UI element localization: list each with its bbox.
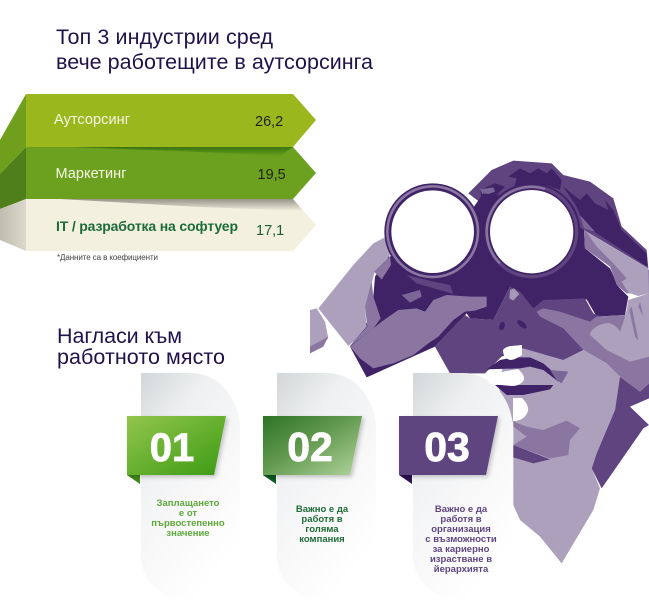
text 03: работя в — [440, 514, 482, 525]
bar: Маркетинг: Маркетинг — [56, 166, 126, 182]
text 02: работя в — [301, 514, 343, 525]
bar: IT / разработка на софтуер: IT / разработка на софтуер — [56, 218, 238, 234]
text 01: е от — [179, 508, 197, 519]
text 02 — [296, 504, 349, 545]
chart: industry arrow bars — [0, 94, 316, 251]
text 02: голяма — [305, 524, 339, 535]
ribbon 02: 02 — [287, 424, 333, 470]
left hand shade — [349, 256, 391, 347]
lip corner — [550, 370, 568, 383]
lower left hand — [350, 295, 487, 368]
text 03: Важно е да — [435, 504, 488, 515]
left hand — [318, 237, 390, 346]
text 03: йерархията — [434, 564, 489, 575]
text 03 — [425, 504, 497, 575]
text 01: първостепенно — [151, 518, 225, 529]
ribbon 01: 01 — [150, 426, 194, 470]
text 03: израстване в — [430, 554, 492, 565]
hair silhouette — [468, 161, 648, 268]
binocular left lens — [384, 183, 481, 280]
finger highlight — [402, 290, 422, 303]
bar: IT / разработка на софтуер — [0, 199, 316, 251]
cheek patch — [513, 421, 580, 458]
right hand upper — [586, 232, 649, 296]
ribbon 03 — [399, 416, 498, 484]
text 01: значение — [166, 528, 210, 539]
illustration: woman with binoculars — [310, 161, 649, 563]
face base — [497, 347, 620, 563]
shaded eye strip — [407, 275, 453, 294]
card 03 — [399, 373, 513, 600]
neck shadow band — [592, 377, 649, 488]
bar: Аутсорсинг: Аутсорсинг — [54, 112, 130, 128]
left arm fragment — [310, 308, 328, 353]
card 01 — [127, 373, 240, 600]
heading: workplace attitudes: Нагласи към — [57, 324, 182, 348]
text 01 — [151, 498, 225, 539]
text 02: Важно е да — [296, 504, 349, 515]
nose highlight — [509, 288, 519, 301]
text 03: с възможности — [425, 534, 497, 545]
ribbon 03: 03 — [424, 424, 470, 470]
ribbon 01 — [127, 416, 226, 484]
title: top 3 industries — [56, 25, 373, 74]
binocular dark mass — [350, 193, 628, 377]
title: top 3 industries: вече работещите в аутсорсинга — [56, 50, 373, 74]
binocular right lens — [483, 183, 580, 280]
left arm shade — [310, 337, 328, 353]
ribbon 02 — [263, 416, 362, 484]
hair highlight — [480, 187, 595, 232]
bar: Аутсорсинг — [0, 94, 316, 174]
footnote: *Данните са в коефициенти — [57, 253, 158, 262]
heading: workplace attitudes — [57, 324, 225, 369]
upper lip — [487, 357, 558, 382]
chin band — [513, 445, 550, 463]
text 01: Заплащането — [157, 498, 220, 509]
right cheek and forearm shade — [537, 308, 649, 392]
right hand shade — [584, 230, 649, 293]
right hand finger lines — [629, 302, 643, 340]
title: top 3 industries: Топ 3 индустрии сред — [56, 25, 273, 49]
nose and cheek shading — [435, 287, 610, 373]
bar: IT / разработка на софтуер: 17,1 — [256, 223, 284, 239]
heading: workplace attitudes: работното място — [57, 345, 225, 369]
hair dark streaks — [480, 168, 647, 267]
white teeth highlights — [484, 345, 528, 421]
right hand lower — [590, 293, 649, 362]
text 03: организация — [431, 524, 491, 535]
nostrils — [498, 319, 528, 331]
card 02 — [263, 373, 376, 600]
text 03: за кариерно — [433, 544, 490, 555]
bar: Аутсорсинг: 26,2 — [255, 114, 283, 130]
lower lip — [495, 385, 553, 395]
bar: Маркетинг — [0, 147, 316, 209]
bar: Маркетинг: 19,5 — [258, 167, 286, 183]
text 02: компания — [299, 534, 345, 545]
